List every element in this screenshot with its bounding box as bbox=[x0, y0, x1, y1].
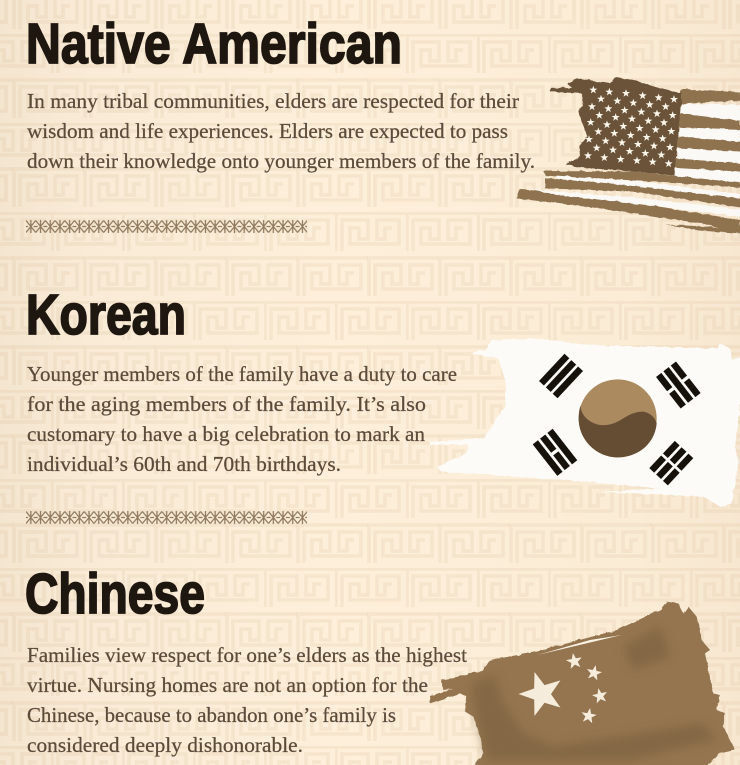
text block: Korean description: customary to have a big celebration to mark an bbox=[27, 422, 425, 446]
text block: Native American description: down their knowledge onto younger members of the family. bbox=[27, 149, 535, 173]
text block: Korean description bbox=[27, 362, 457, 476]
icon: flag stars bbox=[584, 86, 678, 167]
heading: Native American: Native American bbox=[26, 12, 402, 76]
text block: Native American description bbox=[27, 89, 535, 173]
text block: Korean description: individual’s 60th and 70th birthdays. bbox=[27, 452, 341, 476]
section: Chinese bbox=[25, 562, 735, 765]
section: Native American bbox=[26, 12, 740, 233]
text block: Chinese description bbox=[27, 643, 467, 757]
icon: painted Chinese flag bbox=[430, 602, 735, 765]
heading: Korean: Korean bbox=[26, 283, 186, 347]
text block: Native American description: In many tribal communities, elders are respected for their bbox=[27, 89, 519, 113]
text block: Chinese description: Families view respect for one’s elders as the highest bbox=[27, 643, 467, 667]
icon: painted American flag bbox=[517, 77, 740, 233]
icon: trigrams bbox=[533, 354, 701, 485]
icon: painted Korean flag bbox=[430, 338, 740, 507]
text block: Korean description: Younger members of the family have a duty to care bbox=[27, 362, 457, 386]
text block: Chinese description: virtue. Nursing homes are not an option for the bbox=[27, 673, 428, 697]
section: Korean bbox=[26, 283, 740, 507]
text block: Korean description: for the aging members of the family. It’s also bbox=[27, 392, 426, 416]
text block: Chinese description: considered deeply dishonorable. bbox=[27, 733, 303, 757]
heading: Chinese: Chinese bbox=[25, 562, 205, 626]
text block: Chinese description: Chinese, because to abandon one’s family is bbox=[27, 703, 396, 727]
text block: Native American description: wisdom and life experiences. Elders are expected to pass bbox=[27, 119, 508, 143]
icon: flag stars bbox=[514, 652, 609, 724]
icon: taegeuk circle bbox=[579, 379, 657, 457]
